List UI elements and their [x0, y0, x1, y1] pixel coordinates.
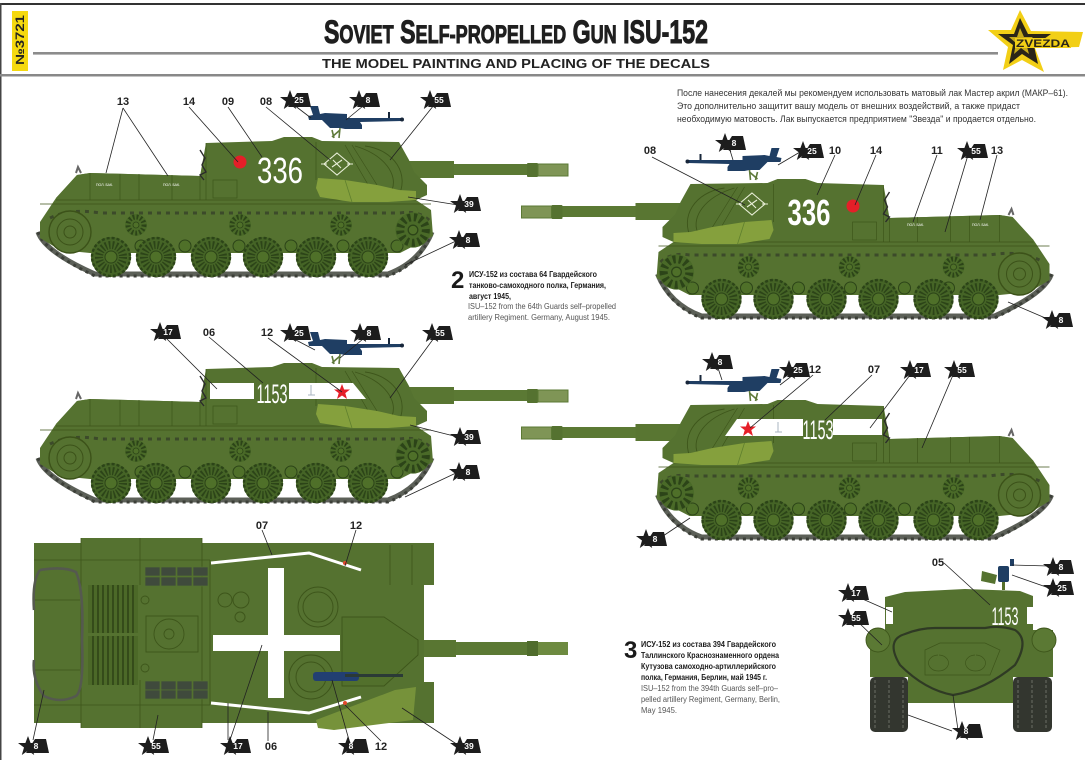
callouts for tank 3: 08: [644, 145, 656, 157]
callouts for tank 1: 8: [466, 235, 471, 245]
callouts for tank 1: 09: [222, 96, 234, 108]
caption scheme 3: ИСУ-152 из состава 394 Гвардейского: [641, 640, 776, 649]
callouts for tank 3: 8: [732, 138, 737, 148]
callouts for tank 2: 8: [367, 328, 372, 338]
callouts for tank 1: 13: [117, 96, 129, 108]
kit number badge: №3721: [13, 15, 27, 65]
side fender lines: [34, 538, 412, 728]
machine gun: [308, 332, 404, 364]
deck decals: [907, 223, 989, 227]
callouts for tank 4: 55: [957, 365, 967, 375]
deck decals: ПОЛ. БАК.: [163, 183, 180, 187]
caption scheme 3: 3: [624, 637, 637, 664]
callouts for tank 3: 13: [991, 145, 1003, 157]
bow cable: [894, 627, 1022, 695]
callouts for front view: 25: [1057, 583, 1067, 593]
callouts for top view: 12: [375, 741, 387, 753]
caption scheme 3: полка, Германия, Берлин, май 1945 г.: [641, 673, 767, 682]
caption scheme 2: танково-самоходного полка, Германия,: [469, 281, 606, 290]
caption scheme 2: artillery Regiment. Germany, August 1945.: [468, 313, 610, 322]
kit number badge: [12, 11, 28, 71]
varnish instructions text: [677, 88, 1068, 124]
track links: [875, 680, 1046, 730]
callouts for tank 1: 14: [183, 96, 196, 108]
callouts for tank 1: 25: [294, 95, 304, 105]
Zvezda logo: ZVEZDA: [1016, 38, 1070, 50]
decal 336: 336: [257, 150, 303, 191]
callouts for tank 4: 07: [868, 364, 880, 376]
white cross decal: [213, 568, 340, 698]
callouts for top view: 8: [34, 741, 39, 751]
hull plan: [34, 538, 434, 728]
varnish instructions text: необходимую матовость. Лак выпускается предприятием "Звезда" и продается отдельно.: [677, 114, 1036, 124]
hull and running gear: [522, 400, 1052, 540]
callouts for tank 3: 14: [870, 145, 883, 157]
callouts for tank 2: 17: [163, 327, 173, 337]
callouts for top view: 06: [265, 741, 277, 753]
callouts for top view: 17: [233, 741, 243, 751]
caption scheme 3: [624, 637, 780, 715]
callouts for front view: 8: [964, 726, 969, 736]
callouts for top view: 12: [350, 520, 362, 532]
callouts for tank 2: 55: [435, 328, 445, 338]
front plate details: [925, 643, 1000, 675]
radiator louvres: [88, 585, 138, 685]
white band rear part: [833, 419, 882, 435]
callouts for top view: 07: [256, 520, 268, 532]
callouts for top view: 55: [151, 741, 161, 751]
title: SOVIET SELF-PROPELLED GUN ISU-152: [324, 14, 708, 50]
white turret band and 1153 decal, tank 2: [210, 379, 366, 409]
callouts for tank 3: [644, 133, 1073, 329]
callouts for tank 4: 8: [718, 357, 723, 367]
callouts for tank 3: 10: [829, 145, 841, 157]
deck decals: ПОЛ. БАК.: [972, 223, 989, 227]
hull front: [870, 589, 1053, 703]
callouts for tank 3: 8: [1059, 315, 1064, 325]
caption scheme 2: 2: [451, 267, 464, 294]
red star dots on stripes: [343, 561, 347, 705]
roof hatches and cupolas: [218, 587, 338, 699]
caption scheme 3: Кутузова самоходно-артиллерийского: [641, 662, 776, 671]
deck decals: [96, 183, 180, 187]
machine gun from above: [313, 672, 403, 681]
top view of the vehicle: [34, 538, 568, 730]
callouts for tank 2: 12: [261, 327, 273, 339]
decal 1153: 1153: [992, 603, 1018, 631]
rear grille panels: [145, 567, 208, 699]
decal emblem: [321, 153, 353, 175]
caption scheme 2: ISU–152 from the 64th Guards self–propelled: [468, 302, 616, 311]
tracks: [870, 677, 1052, 732]
callouts for top view: 8: [349, 741, 354, 751]
callouts for front view: 8: [1059, 562, 1064, 572]
varnish instructions text: Это дополнительно защитит вашу модель от внешних воздействий, а также придаст: [677, 101, 1021, 111]
callouts for tank 4: 12: [809, 364, 821, 376]
decal red star: [740, 421, 756, 436]
caption scheme 3: pelled artillery Regiment, Germany, Berlin,: [641, 695, 780, 704]
deck decals: ПОЛ. БАК.: [907, 223, 924, 227]
tank side view 3: scheme 2, gun to the left: [522, 148, 1052, 319]
decal red star: [846, 200, 860, 212]
callouts for tank 4: 8: [653, 534, 658, 544]
callouts for tank 1: 8: [366, 95, 371, 105]
machine gun: [686, 148, 782, 180]
subtitle: THE MODEL PAINTING AND PLACING OF THE DECALS: [322, 57, 710, 71]
machine gun front: [981, 559, 1014, 590]
caption scheme 3: May 1945.: [641, 706, 677, 715]
white band: [725, 419, 803, 436]
deck decals: ПОЛ. БАК.: [96, 183, 113, 187]
hull and running gear: [38, 363, 568, 503]
decal emblem: [736, 193, 768, 215]
Zvezda logo: [988, 10, 1083, 72]
callouts for tank 2: 8: [466, 467, 471, 477]
callouts for tank 2: [150, 322, 481, 497]
engine hatch: [141, 596, 198, 672]
decal red star: [234, 156, 246, 168]
callouts for front view: 05: [932, 557, 944, 569]
white side stripes: [211, 553, 361, 713]
caption scheme 3: Таллинского Краснознаменного ордена: [641, 651, 779, 660]
tank side view 1: scheme 2, gun to the right: [38, 106, 568, 277]
light green fender: [316, 687, 416, 730]
decal 336: 336: [788, 192, 830, 233]
callouts for tank 2: 39: [464, 432, 474, 442]
callouts for front view: 17: [851, 588, 861, 598]
gun mantlet outline: [342, 617, 418, 686]
callouts for tank 3: 11: [931, 145, 943, 157]
decal 1153: 1153: [802, 415, 834, 445]
callouts for front view: [838, 557, 1074, 740]
callouts for tank 4: 17: [914, 365, 924, 375]
gun barrel: [420, 640, 568, 657]
caption scheme 3: ISU–152 from the 394th Guards self–pro–: [641, 684, 779, 693]
callouts for top view: 39: [464, 741, 474, 751]
callouts for tank 3: 55: [971, 146, 981, 156]
caption scheme 2: август 1945,: [469, 292, 511, 301]
callouts for tank 1: 08: [260, 96, 272, 108]
front view of the vehicle: [866, 559, 1056, 732]
machine gun: [308, 106, 404, 138]
callouts for tank 4: 25: [793, 365, 803, 375]
callouts for tank 1: 55: [434, 95, 444, 105]
callouts for tank 3: 25: [807, 146, 817, 156]
rear towing cable: [34, 568, 82, 700]
hull and running gear: [522, 179, 1052, 319]
side stripes: [886, 607, 1035, 624]
callouts for tank 2: 25: [294, 328, 304, 338]
white turret band and 1153 decal, tank 2: 1153: [256, 379, 288, 409]
caption scheme 2: ИСУ-152 из состава 64 Гвардейского: [469, 270, 597, 279]
machine gun: [686, 369, 782, 401]
callouts for tank 1: 39: [464, 199, 474, 209]
fuel drums: [866, 628, 1056, 652]
caption scheme 2: [451, 267, 616, 322]
hull and running gear: [38, 137, 568, 277]
callouts for tank 4: [636, 352, 975, 548]
callouts for tank 1: [106, 90, 481, 265]
callouts for tank 2: 06: [203, 327, 215, 339]
callouts for top view: [18, 520, 481, 755]
tank side view 4: scheme 3, gun to the left: [522, 369, 1052, 540]
callouts for front view: 55: [851, 613, 861, 623]
tank side view 2: scheme 3, gun to the right: [38, 332, 568, 503]
